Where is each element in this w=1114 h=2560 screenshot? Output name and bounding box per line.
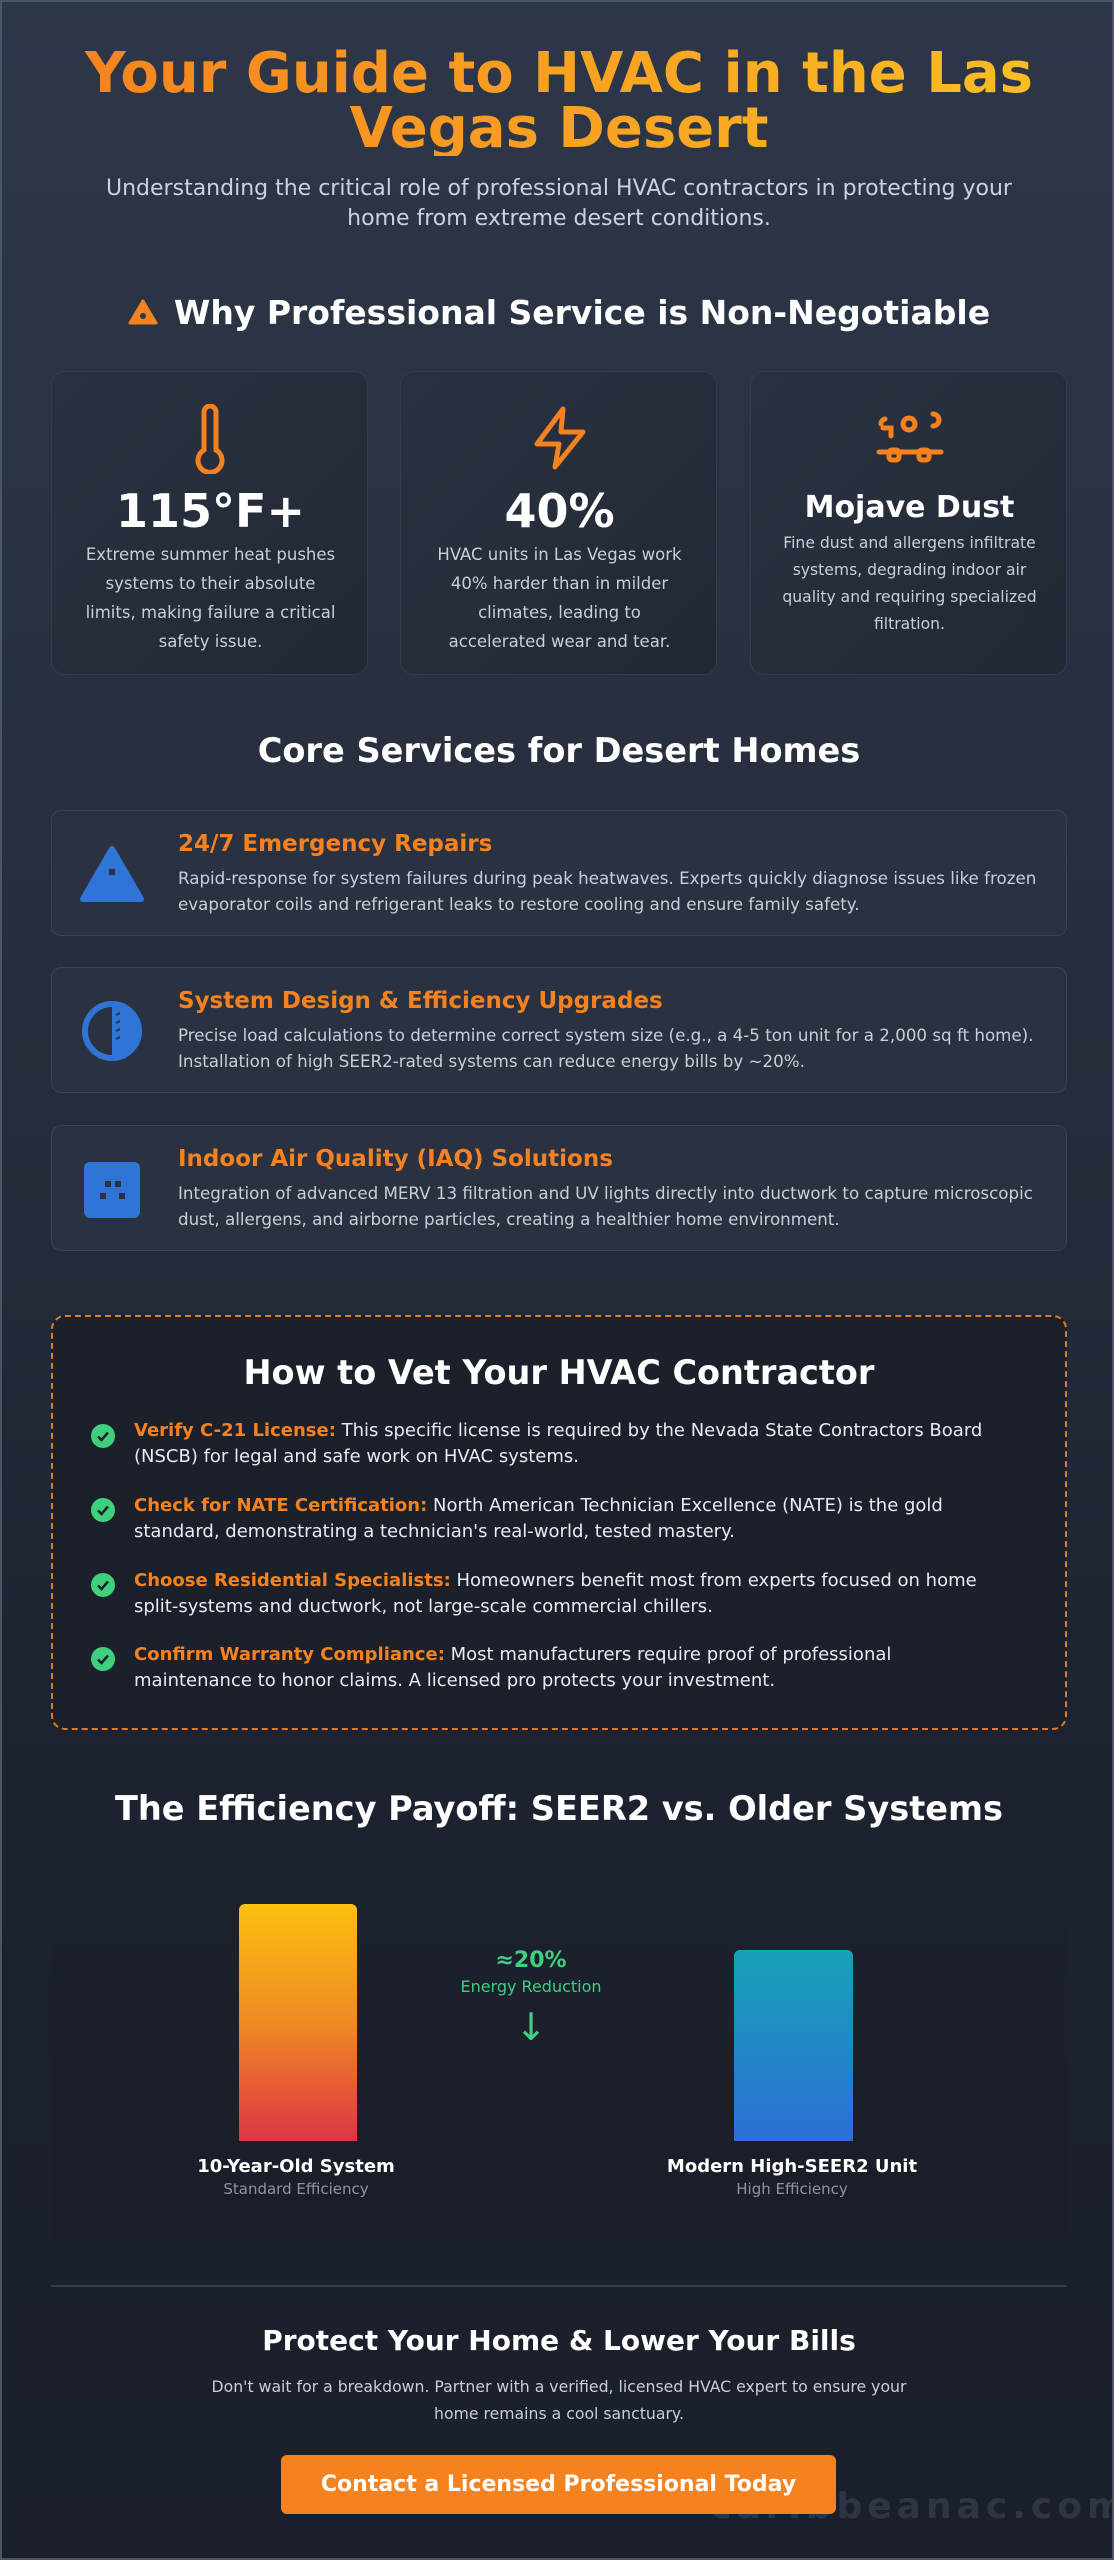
chart: SEER2 comparison — [51, 1864, 1067, 2240]
checklist items: Choose Residential Specialists: Homeowners benefit most from experts focused on home split-systems and ductwork, not large-scale commercial chillers. — [134, 1570, 977, 1617]
service: emergency — [51, 810, 1067, 936]
service: emergency: Rapid-response for system failures during peak heatwaves. Experts quickly diagnose issues like frozen evaporator coils and refrigerant leaks to restore cooling and ensure family safety. — [178, 868, 1036, 914]
stat 115F: 115°F+ — [116, 484, 305, 538]
checklist items: Check for NATE Certification: North American Technician Excellence (NATE) is the gold standard, demonstrating a technician's real-world, tested mastery. — [134, 1495, 943, 1542]
subtitle: Understanding the critical role of professional HVAC contractors in protecting your home from extreme desert conditions. — [106, 176, 1012, 231]
card: heat — [51, 371, 368, 675]
heading: why professional: Why Professional Service is Non-Negotiable — [174, 293, 990, 332]
checklist items: Confirm Warranty Compliance: Most manufacturers require proof of professional maintenance to honor claims. A licensed pro protects your investment. — [134, 1644, 891, 1691]
label: modern: High Efficiency — [736, 2180, 848, 2198]
bar: modern — [734, 1950, 853, 2141]
text: cta: Don't wait for a breakdown. Partner with a verified, licensed HVAC expert to ensure your home remains a cool sanctuary. — [212, 2377, 906, 2423]
label: modern: Modern High-SEER2 Unit — [667, 2156, 917, 2177]
service: design: System Design & Efficiency Upgrades — [178, 988, 663, 1014]
label: old — [197, 2156, 395, 2198]
icon: bolt — [534, 406, 586, 470]
text: Fine dust and allergens infiltrate systems, degrading indoor air quality and requiring specialized filtration. — [782, 534, 1037, 633]
service: design — [51, 967, 1067, 1093]
checklist items — [91, 1420, 982, 1691]
card: dust — [750, 371, 1067, 675]
heading mojave: Mojave Dust — [805, 490, 1014, 525]
icon: warning triangle — [80, 846, 144, 902]
service: IAQ — [51, 1125, 1067, 1251]
heading: efficiency: The Efficiency Payoff: SEER2 vs. Older Systems — [115, 1789, 1003, 1828]
button — [281, 2455, 836, 2514]
heading: protect: Protect Your Home & Lower Your Bills — [262, 2324, 856, 2357]
service: design: Precise load calculations to determine correct system size (e.g., a 4-5 ton unit for a 2,000 sq ft home). Installation of high SEER2-rated systems can reduce energy bills by ~20%. — [178, 1025, 1034, 1071]
icon: filter square — [84, 1162, 140, 1218]
checklist items: Verify C-21 License: This specific license is required by the Nevada State Contractors Board (NSCB) for legal and safe work on HVAC systems. — [134, 1420, 982, 1467]
icon: half circle — [82, 1001, 142, 1061]
label: old: Standard Efficiency — [223, 2180, 369, 2198]
panel: vet contractor — [51, 1315, 1067, 1730]
callout: 20%: ≈20% — [495, 1948, 567, 1973]
heading: core services: Core Services for Desert Homes — [258, 731, 860, 770]
icon: thermometer — [195, 404, 224, 474]
bar: old — [239, 1904, 357, 2141]
callout: 20%: Energy Reduction — [460, 1977, 602, 1996]
stat 40%: 40% — [504, 484, 615, 538]
service: IAQ: Integration of advanced MERV 13 filtration and UV lights directly into ductwork to capture microscopic dust, allergens, and airborne particles, creating a healthier home environment. — [178, 1183, 1033, 1229]
service: IAQ: Indoor Air Quality (IAQ) Solutions — [178, 1146, 613, 1172]
label: modern — [667, 2156, 917, 2198]
text: HVAC units in Las Vegas work 40% harder than in milder climates, leading to accelerated wear and tear. — [437, 545, 682, 651]
heading vet: How to Vet Your HVAC Contractor — [244, 1353, 874, 1392]
icon: dust — [876, 412, 944, 462]
service: emergency: 24/7 Emergency Repairs — [178, 831, 492, 857]
title: Your Guide to HVAC in the Las Vegas Desert — [85, 41, 1033, 161]
callout: 20%: ↓ — [515, 2005, 547, 2049]
button: Contact a Licensed Professional Today — [321, 2472, 796, 2497]
card: 40% — [400, 371, 717, 675]
callout: 20% — [460, 1948, 602, 2049]
label: old: 10-Year-Old System — [197, 2156, 395, 2177]
text: Extreme summer heat pushes systems to their absolute limits, making failure a critical safety issue. — [86, 545, 335, 651]
